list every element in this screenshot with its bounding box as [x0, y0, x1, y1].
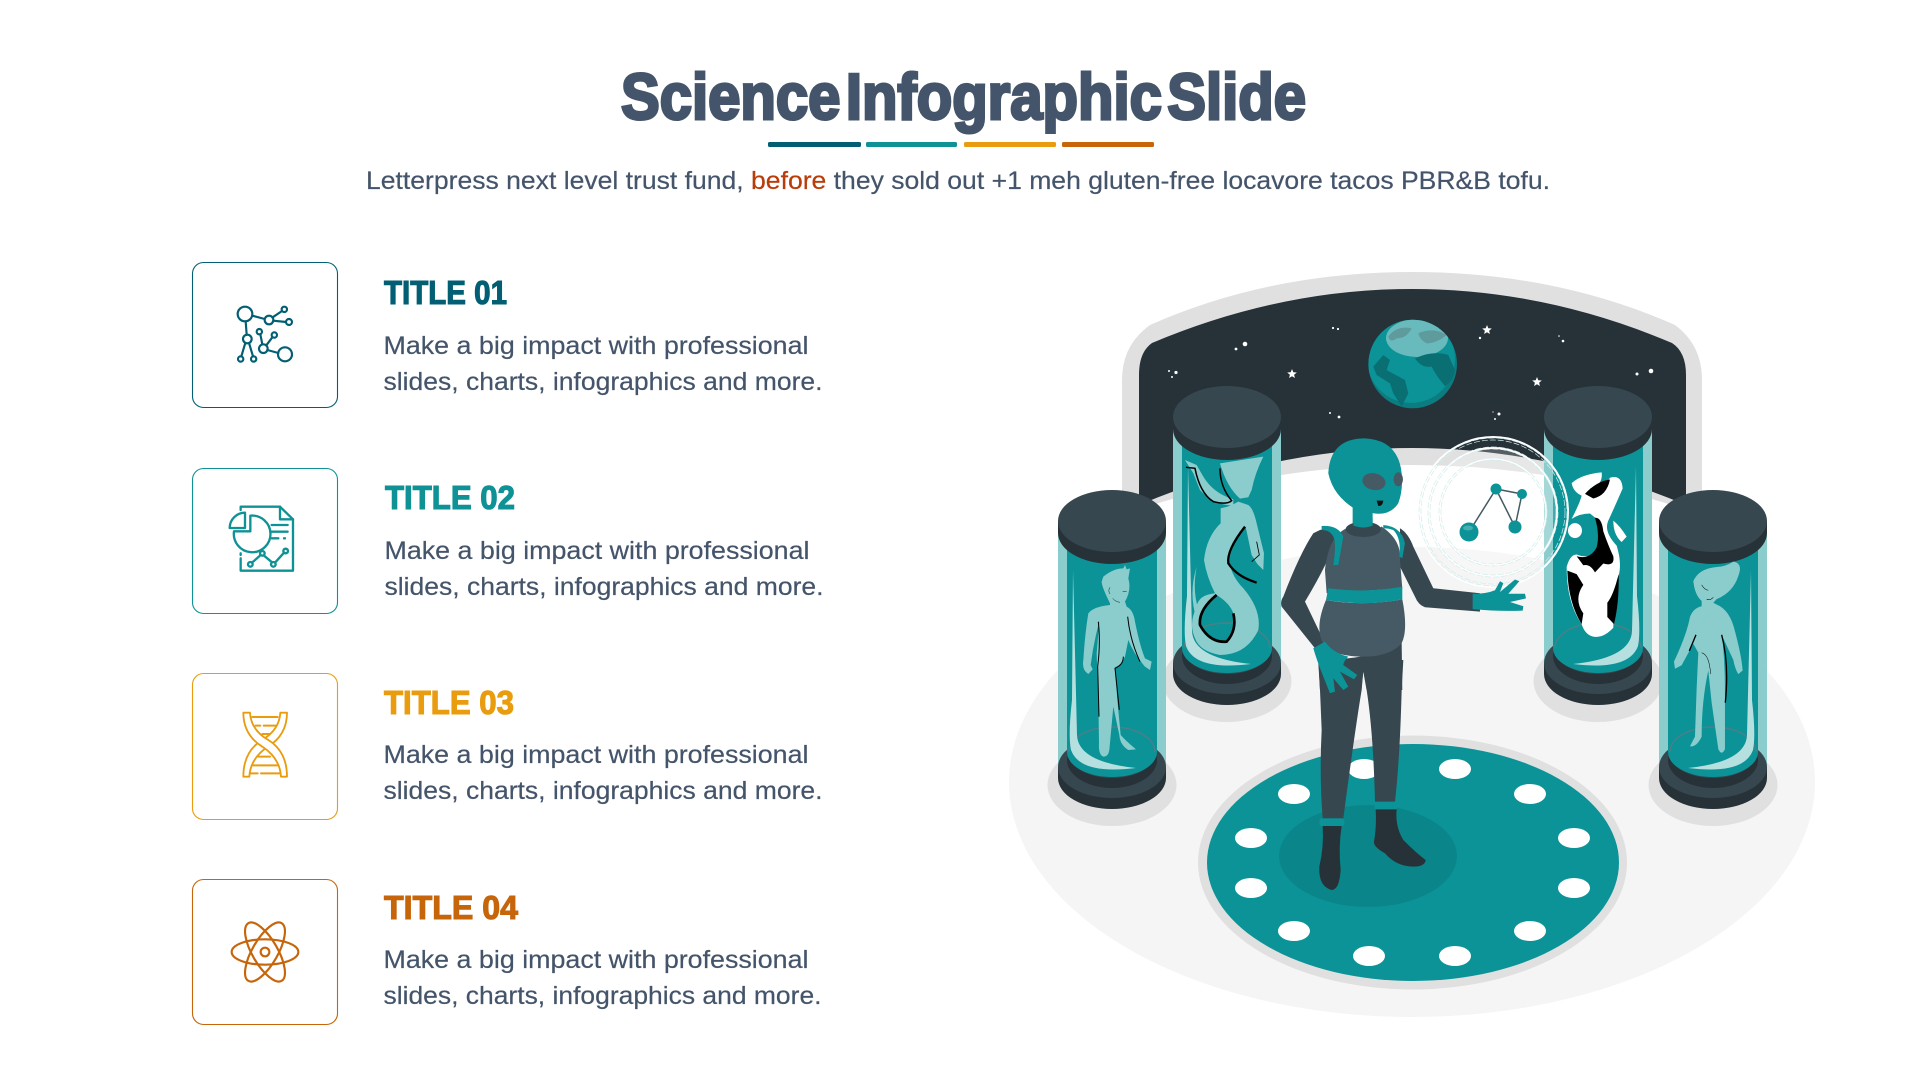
heading 04: TITLE 04: [384, 889, 519, 926]
subtitle: Letterpress next level trust fund, before they sold out +1 meh gluten-free locavore tacos PBR&B tofu.: [366, 167, 1550, 195]
text 02: slides, charts, infographics and more.: [384, 573, 824, 601]
icon card 03: [192, 674, 338, 820]
icon: DNA helix: [243, 713, 287, 777]
heading 01: TITLE 01: [384, 274, 507, 311]
female specimen: [1674, 562, 1743, 753]
icon: atom: [232, 917, 298, 987]
stars: [1168, 325, 1653, 420]
platform rim: [1198, 736, 1627, 990]
heading 03: TITLE 03: [384, 684, 514, 721]
panel: item 03: [192, 674, 822, 820]
tube: front left, male body: [1048, 490, 1176, 826]
male specimen: [1083, 565, 1152, 757]
tube: front right, female body: [1648, 490, 1778, 826]
text 04: [384, 946, 822, 1010]
text 03: slides, charts, infographics and more.: [384, 777, 822, 805]
legs and socks: [1318, 660, 1426, 890]
text 02: Make a big impact with professional: [384, 537, 810, 565]
icon card 01: [192, 262, 338, 408]
lava specimen: [1567, 472, 1627, 637]
molecule: [1460, 484, 1527, 542]
glass highlight: [1070, 570, 1136, 770]
text 01: slides, charts, infographics and more.: [384, 368, 822, 396]
text 04: slides, charts, infographics and more.: [384, 982, 822, 1010]
text 04: Make a big impact with professional: [384, 946, 808, 974]
glass highlight: [1185, 466, 1251, 666]
panel: item 04: [192, 880, 822, 1024]
alien shadow: [1279, 805, 1457, 907]
panel: item 01: [192, 262, 822, 408]
icon: report document: [230, 507, 293, 571]
heading 02: TITLE 02: [385, 479, 515, 516]
icon: network nodes: [238, 307, 292, 362]
glass highlight: [1573, 466, 1639, 666]
panel: item 02: [192, 468, 824, 614]
icon card 04: [192, 880, 338, 1024]
title underline bars: [768, 142, 1154, 147]
title: Science Infographic Slide: [621, 60, 1306, 133]
text 01: Make a big impact with professional: [384, 332, 808, 360]
illustration: alien science lab: [1009, 272, 1815, 1017]
wall frame: [1122, 272, 1702, 515]
icon card 02: [192, 468, 338, 614]
text 02: [384, 537, 824, 601]
alien raised hand: [1473, 580, 1526, 611]
platform disc: [1207, 744, 1619, 981]
mermaid specimen: [1185, 457, 1264, 655]
hologram sphere: [1418, 437, 1568, 587]
floor: [1009, 547, 1815, 1017]
earth globe: [1367, 315, 1457, 408]
glass highlight: [1688, 570, 1754, 770]
text 03: Make a big impact with professional: [384, 741, 808, 769]
space window: [1139, 289, 1686, 505]
platform lights: [1235, 759, 1590, 966]
text 03: [384, 741, 822, 805]
upper body: [1281, 438, 1480, 693]
tube: back right, lava: [1534, 386, 1662, 722]
tube: back left, mermaid: [1162, 386, 1292, 722]
text 01: [384, 332, 822, 396]
alien figure: [1281, 438, 1480, 890]
